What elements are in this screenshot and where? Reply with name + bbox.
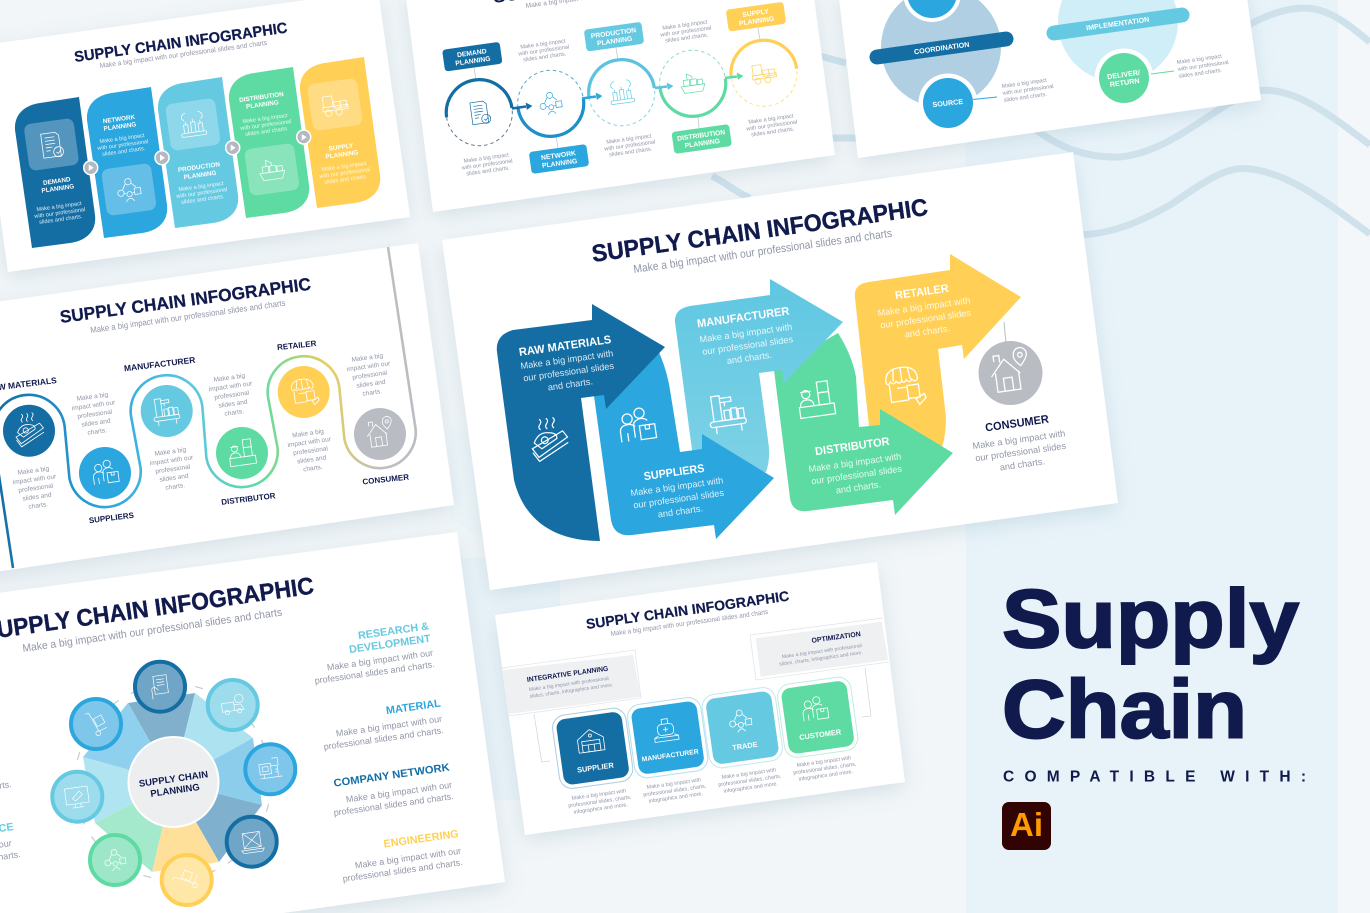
column: demand planning: DEMAND — [43, 176, 71, 187]
descriptions: impact with our — [12, 473, 58, 486]
label: distribution planning: DISTRIBUTION — [677, 129, 726, 143]
descriptions: infographics and more. — [798, 769, 853, 783]
label: demand planning — [442, 42, 503, 72]
label: distributor: Make a big impact with — [808, 451, 902, 474]
tile: supplier — [551, 707, 634, 790]
icon: suppliers — [618, 406, 657, 442]
panel: supplier to customer tiles — [495, 562, 905, 835]
panel: main supply chain arrows — [442, 152, 1118, 590]
step: distribution planning circle — [660, 50, 726, 116]
descriptions — [459, 19, 799, 178]
stop: distributor — [216, 427, 276, 507]
stop: suppliers: SUPPLIERS — [88, 511, 135, 525]
descriptions: slides and charts. — [751, 126, 795, 138]
label: demand planning: DEMAND — [457, 48, 487, 59]
descriptions: charts. — [165, 482, 186, 492]
label: distribution planning: PLANNING — [684, 138, 720, 150]
box: optimization: Make a big impact with professional — [782, 643, 862, 660]
descriptions: professional — [214, 390, 250, 401]
connector to consumer — [1004, 322, 1006, 343]
descriptions: with our professional — [659, 25, 712, 39]
heading: SUPPLY CHAIN INFOGRAPHIC — [585, 588, 790, 632]
column: distribution planning: DISTRIBUTION — [239, 91, 285, 104]
step: network planning circle — [518, 70, 584, 136]
wheel segments — [83, 693, 262, 872]
column: distribution planning: with our professional — [239, 119, 292, 132]
label: manufacturer: and charts. — [726, 350, 773, 366]
label: suppliers — [630, 463, 727, 523]
icon: Adobe Illustrator — [1002, 802, 1051, 850]
box: integrative planning — [502, 650, 641, 716]
stop: consumer — [354, 408, 410, 486]
label: raw materials: our professional slides — [523, 361, 615, 383]
label: consumer: our professional slides — [975, 441, 1067, 463]
wheel node: machine — [245, 744, 295, 794]
icon: consumer — [988, 347, 1031, 393]
descriptions: with our professional — [517, 44, 570, 58]
implementation circle: RETURN — [1109, 76, 1140, 89]
stop: manufacturer — [123, 355, 196, 437]
stop: raw materials — [0, 375, 58, 457]
label: retailer: our professional slides — [880, 308, 972, 330]
icon: raw food — [528, 416, 570, 462]
descriptions: professional slides, charts, — [568, 795, 632, 809]
label: retailer: RETAILER — [894, 283, 950, 302]
tile: manufacturer: MANUFACTURER — [641, 749, 699, 763]
panel: coordination and implementation — [838, 0, 1261, 158]
tile: customer — [776, 676, 859, 759]
tile: manufacturer — [626, 696, 709, 779]
label: supply planning — [726, 2, 786, 32]
subheading: Make a big impact with our professional slides and charts — [99, 40, 268, 70]
label: suppliers: Make a big impact with — [630, 475, 724, 498]
subheading: Make a big impact with our professional slides and charts — [610, 609, 769, 638]
implementation circle: slides and charts. — [1178, 68, 1223, 80]
consumer circle — [978, 341, 1042, 405]
descriptions: professional slides, charts, — [643, 784, 707, 798]
descriptions: infographics and more. — [648, 791, 703, 805]
descriptions: slides and charts. — [665, 32, 709, 44]
step: demand planning circle — [446, 80, 512, 146]
implementation circle: with our professional — [1176, 60, 1229, 73]
column: demand planning: with our professional — [33, 207, 86, 220]
descriptions: Make a big impact — [463, 152, 510, 165]
tile: trade: TRADE — [732, 740, 758, 752]
descriptions: Make a big impact with — [646, 777, 701, 791]
column: network planning — [87, 87, 167, 238]
label: distribution planning — [671, 124, 732, 154]
label: supply planning: PLANNING — [739, 16, 775, 28]
subheading: Make a big impact with our professional slides and charts — [90, 298, 286, 335]
implementation circle: DELIVER/ — [1106, 68, 1141, 81]
text: compatible with: COMPATIBLE WITH: — [1003, 768, 1306, 786]
column: production planning: with our professional — [175, 187, 228, 200]
text: research and development: DEVELOPMENT — [348, 633, 432, 656]
label: consumer: Make a big impact with — [972, 428, 1066, 451]
coordination circle: SOURCE — [932, 97, 964, 109]
stop: manufacturer: MANUFACTURER — [123, 355, 196, 373]
title: Supply Chain: Supply — [1002, 572, 1299, 665]
descriptions: charts. — [224, 408, 245, 418]
box: integrative planning: INTEGRATIVE PLANNING — [527, 666, 609, 684]
subheading: Make a big impact with our professional slides and charts — [633, 228, 893, 276]
text: material: MATERIAL — [385, 698, 442, 717]
wheel center — [128, 737, 218, 827]
panel: circular planning steps — [405, 0, 835, 212]
label: distributor: DISTRIBUTOR — [814, 436, 891, 458]
wheel node: yellow — [162, 855, 212, 905]
descriptions: slides and — [22, 492, 52, 503]
arrow: suppliers — [594, 350, 774, 539]
column: demand planning — [15, 97, 95, 248]
arrow: manufacturer — [675, 279, 843, 480]
coordination circle: Make a big impact — [1001, 78, 1048, 90]
label: raw materials: and charts. — [547, 376, 594, 393]
descriptions: slides and — [159, 473, 189, 484]
descriptions: slides and charts. — [523, 51, 567, 63]
implementation circle — [1054, 0, 1230, 108]
column: distribution planning — [229, 67, 309, 218]
descriptions: Make a big impact — [606, 133, 652, 146]
label: distributor — [808, 436, 905, 499]
descriptions: Make a big — [17, 465, 50, 477]
wheel node: green — [90, 835, 140, 885]
column: network planning: with our professional — [96, 139, 149, 152]
label: raw materials: RAW MATERIALS — [518, 334, 612, 359]
text: research and development: Make a big impact with our — [326, 648, 434, 672]
descriptions: slides and — [356, 379, 386, 390]
text: cropped left labels — [0, 779, 21, 876]
connector lines — [534, 668, 871, 762]
tile: trade — [701, 686, 784, 769]
label: production planning: PLANNING — [597, 36, 633, 48]
text: material: professional slides and charts. — [323, 725, 444, 752]
heading: SUPPLY CHAIN INFOGRAPHIC — [59, 274, 312, 327]
wheel node: crate — [227, 817, 277, 867]
step: production planning circle — [589, 60, 655, 126]
heading: SUPPLY CHAIN INFOGRAPHIC — [73, 20, 289, 66]
descriptions — [11, 351, 395, 512]
wheel node: trolley — [71, 699, 121, 749]
label: retailer — [877, 283, 974, 343]
stop: consumer: CONSUMER — [362, 473, 410, 486]
tile: supplier: SUPPLIER — [576, 760, 615, 775]
descriptions: slides and charts. — [609, 146, 653, 158]
panel: demand to supply planning columns — [0, 0, 410, 272]
text: company network — [331, 762, 454, 818]
column: supply planning: with our professional — [318, 167, 371, 180]
step: supply planning circle — [731, 40, 797, 106]
dashed ring — [75, 684, 271, 880]
stop: suppliers — [79, 447, 135, 525]
label: suppliers: and charts. — [657, 503, 704, 520]
column: network planning: slides and charts. — [102, 146, 146, 158]
wheel center: SUPPLY CHAIN — [138, 769, 209, 790]
stop: distributor: DISTRIBUTOR — [221, 491, 276, 507]
title: Supply Chain: Chain — [1002, 662, 1247, 756]
icon: manufacturer — [706, 392, 748, 435]
descriptions: Make a big — [292, 428, 325, 439]
column: supply planning: SUPPLY — [328, 142, 354, 153]
text: engineering: Make a big impact with our — [354, 846, 462, 870]
descriptions: infographics and more. — [573, 802, 628, 816]
column: production planning: PRODUCTION — [178, 161, 221, 174]
tile: customer: CUSTOMER — [799, 727, 842, 742]
descriptions: Make a big impact — [662, 19, 708, 32]
text: company network: COMPANY NETWORK — [333, 762, 451, 790]
implementation circle: IMPLEMENTATION — [1086, 15, 1150, 32]
text: company network: professional slides and charts. — [333, 791, 454, 818]
winding line — [0, 247, 416, 568]
label: retailer: Make a big impact with — [877, 295, 971, 318]
column: demand planning: Make a big impact — [36, 201, 82, 213]
box: optimization: OPTIMIZATION — [811, 631, 861, 645]
column: supply planning: PLANNING — [325, 149, 359, 161]
column: supply planning: Make a big impact — [321, 161, 367, 173]
descriptions: impact with our — [149, 454, 195, 467]
column: production planning: PLANNING — [183, 170, 217, 181]
label: production planning: PRODUCTION — [590, 27, 637, 40]
descriptions: slides and — [81, 418, 111, 429]
descriptions: impact with our — [71, 399, 117, 412]
label: consumer — [972, 414, 1069, 476]
descriptions: infographics and more. — [723, 781, 778, 795]
column: network planning: NETWORK — [102, 114, 136, 125]
wheel node: monitor — [52, 772, 102, 822]
wheel center: PLANNING — [150, 782, 200, 800]
stop: retailer — [277, 339, 330, 418]
descriptions: slides and — [297, 454, 327, 465]
arrow: raw materials — [497, 304, 665, 541]
connector lines — [474, 28, 760, 148]
descriptions: impact with our — [287, 436, 332, 449]
text: engineering — [340, 828, 463, 884]
descriptions: Make a big impact with — [721, 767, 776, 781]
panel: supply chain planning wheel — [0, 532, 505, 913]
label: supply planning: SUPPLY — [742, 8, 770, 19]
arrow: retailer — [855, 254, 1021, 450]
heading: SUPPLY CHAIN INFOGRAPHIC — [590, 194, 930, 268]
descriptions: Make a big impact with — [796, 755, 851, 769]
column: supply planning — [300, 57, 380, 208]
descriptions: charts. — [303, 464, 323, 473]
label: distributor: our professional slides — [811, 464, 903, 486]
arrow: distributor — [774, 333, 953, 515]
descriptions: Make a big — [351, 352, 384, 364]
coordination circle — [877, 0, 1055, 132]
descriptions: charts. — [28, 501, 49, 511]
descriptions: professional — [18, 483, 54, 494]
column: production planning: slides and charts. — [181, 194, 225, 206]
label: distributor: and charts. — [835, 479, 882, 496]
descriptions: impact with our — [208, 380, 254, 393]
text: research and development: professional slides and charts. — [314, 659, 435, 686]
wheel node: top — [135, 662, 185, 712]
title: Supply Chain — [1002, 572, 1299, 756]
descriptions: Make a big impact — [520, 38, 566, 51]
text: material — [321, 698, 444, 752]
text: engineering: ENGINEERING — [383, 828, 459, 850]
descriptions: Make a big impact with — [571, 788, 626, 802]
box: integrative planning: slides, charts, infographics and more. — [529, 682, 614, 700]
label: manufacturer: our professional slides — [702, 334, 794, 357]
column: distribution planning: slides and charts. — [245, 126, 289, 138]
descriptions: Make a big impact — [748, 113, 794, 126]
descriptions: slides and charts. — [466, 165, 510, 177]
column: distribution planning: Make a big impact — [242, 113, 288, 125]
descriptions: charts. — [362, 388, 383, 398]
label: consumer: and charts. — [999, 456, 1046, 473]
label: manufacturer: MANUFACTURER — [696, 306, 791, 330]
descriptions: professional — [155, 464, 191, 475]
descriptions: slides and — [218, 399, 248, 410]
descriptions: professional — [352, 370, 388, 381]
coordination circle: slides and charts. — [1003, 92, 1048, 104]
column: network planning: PLANNING — [103, 121, 137, 133]
descriptions: charts. — [87, 427, 108, 437]
label: manufacturer: Make a big impact with — [699, 322, 793, 345]
descriptions: Make a big — [213, 372, 246, 384]
column: demand planning: slides and charts. — [39, 214, 83, 226]
text: company network: Make a big impact with our — [345, 780, 453, 804]
text: research and development — [312, 620, 435, 686]
text: material: Make a big impact with our — [335, 714, 443, 738]
wheel node: truck — [208, 680, 258, 730]
icon: Adobe Illustrator: Ai — [1010, 806, 1043, 843]
descriptions: professional — [77, 409, 113, 420]
descriptions: impact with our — [346, 360, 392, 373]
descriptions: professional slides, charts, — [793, 762, 857, 776]
descriptions: Make a big — [154, 446, 187, 458]
label: demand planning: PLANNING — [455, 56, 491, 68]
text: engineering: professional slides and charts. — [342, 857, 463, 884]
column: demand planning: PLANNING — [41, 183, 75, 195]
label: network planning — [529, 144, 589, 174]
label: manufacturer — [696, 306, 796, 369]
icon: retailer — [884, 365, 927, 409]
coordination circle: with our professional — [1001, 84, 1054, 97]
text: research and development: RESEARCH & — [357, 620, 430, 642]
label: suppliers: SUPPLIERS — [643, 463, 706, 483]
label: network planning: NETWORK — [541, 150, 577, 162]
descriptions: with our professional — [603, 139, 656, 153]
implementation circle: Make a big impact — [1176, 54, 1223, 66]
column: production planning: Make a big impact — [178, 181, 224, 193]
descriptions: Make a big — [76, 391, 109, 403]
icon: distributor — [796, 380, 836, 418]
descriptions: with our professional — [460, 158, 513, 172]
label: production planning — [584, 22, 644, 52]
label: consumer: CONSUMER — [985, 414, 1050, 434]
column: network planning: Make a big impact — [99, 133, 145, 145]
decorative waves — [712, 8, 1370, 235]
box: optimization — [750, 618, 889, 680]
label: retailer: and charts. — [904, 323, 951, 340]
column: supply planning: slides and charts. — [324, 174, 368, 186]
icon: play connectors — [84, 130, 311, 175]
descriptions — [567, 755, 858, 816]
column: distribution planning: PLANNING — [246, 99, 279, 111]
box: optimization: slides, charts, infographics and more. — [779, 650, 863, 668]
label: network planning: PLANNING — [542, 158, 578, 170]
panel: winding path — [0, 243, 454, 577]
coordination circle: COORDINATION — [913, 40, 970, 56]
column: production planning — [158, 77, 238, 228]
descriptions: professional slides, charts, — [718, 774, 782, 788]
descriptions: with our professional — [745, 119, 798, 133]
descriptions: professional — [293, 445, 329, 457]
subheading: Make a big impact with our professional slides and charts — [22, 607, 283, 655]
label: suppliers: our professional slides — [633, 488, 725, 510]
label: raw materials: Make a big impact with — [520, 348, 614, 371]
arrows between circles — [512, 73, 743, 110]
label: raw materials — [518, 334, 617, 396]
stop: retailer: RETAILER — [277, 339, 317, 352]
box: integrative planning: Make a big impact with professional — [528, 676, 609, 693]
